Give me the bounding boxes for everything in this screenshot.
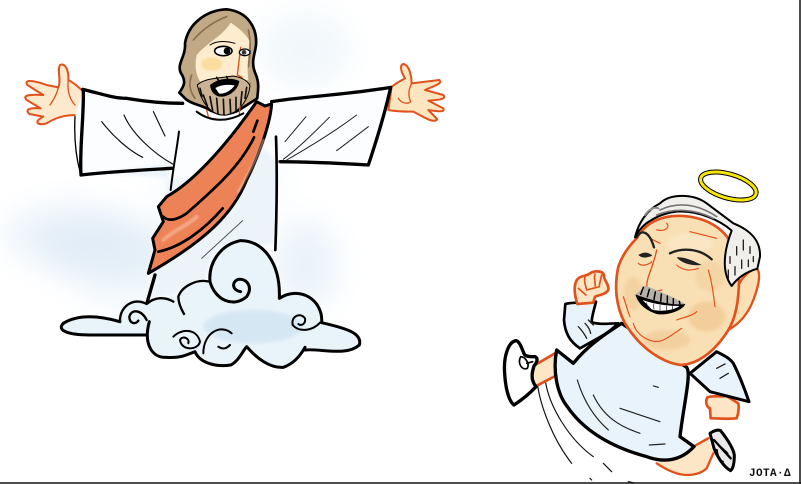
moustache: [635, 285, 685, 304]
face: [196, 23, 250, 84]
right hand: [388, 64, 444, 121]
eyes and eyebrows: [637, 232, 712, 259]
cloud: [61, 241, 360, 367]
motion lines: [537, 377, 633, 483]
hair: [635, 196, 760, 286]
background: blue sky wash: [5, 12, 350, 310]
robe: [75, 87, 391, 302]
head: [616, 216, 739, 365]
left hand: [25, 65, 83, 124]
figure: Jesus with open arms on a cloud: [25, 9, 444, 367]
sash: [148, 102, 272, 273]
ear: [728, 268, 759, 330]
right leg and shoe: [657, 430, 734, 475]
mouth: [635, 294, 685, 314]
left sleeve and fist: [564, 271, 618, 348]
robe: [555, 323, 749, 460]
hair strands: [190, 17, 250, 103]
rear leg and shoe: [504, 341, 555, 405]
hair: [179, 9, 258, 114]
right hand: [706, 396, 739, 419]
halo: [697, 167, 759, 205]
beard and mouth: [197, 76, 250, 120]
signature: JOTA·Δ: [749, 468, 791, 480]
figure: running man with halo: [504, 167, 760, 483]
